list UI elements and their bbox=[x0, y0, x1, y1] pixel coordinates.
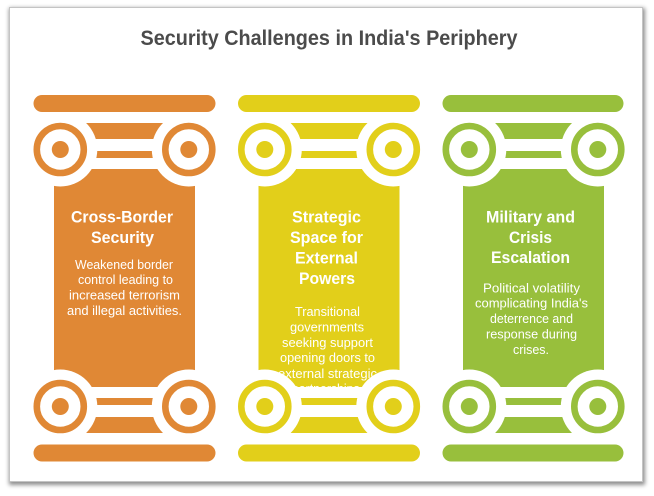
text: military and crisis description: complicating India's bbox=[475, 296, 588, 311]
heading: cross-border security: Cross-Border bbox=[71, 208, 173, 227]
text: strategic space description: partnerships. bbox=[292, 381, 363, 396]
heading: military and crisis escalation bbox=[486, 208, 575, 267]
icon: top right volute bbox=[574, 126, 621, 173]
text: cross-border description: increased terrorism bbox=[69, 288, 180, 302]
heading: military and crisis escalation: Military and bbox=[486, 208, 575, 227]
icon: bottom right volute bbox=[165, 383, 212, 430]
heading: strategic space for external powers: External bbox=[295, 248, 358, 268]
text: military and crisis description: crises. bbox=[513, 342, 549, 357]
text: cross-border description: and illegal activities. bbox=[67, 303, 182, 318]
icon: bottom left volute bbox=[446, 383, 493, 430]
top capital bands bbox=[264, 123, 394, 158]
heading: military and crisis escalation: Escalation bbox=[491, 248, 570, 267]
icon: top left volute bbox=[37, 126, 84, 173]
bottom bar bbox=[442, 444, 624, 462]
white halos around volutes bbox=[228, 112, 430, 444]
text: military and crisis description bbox=[475, 280, 588, 357]
text: military and crisis description: response during bbox=[486, 326, 577, 342]
text: military and crisis description: deterrence and bbox=[490, 311, 573, 326]
white mask below column body bbox=[258, 387, 400, 398]
white halos around volutes bbox=[432, 112, 635, 444]
top bar bbox=[442, 95, 624, 112]
heading: cross-border security: Security bbox=[91, 228, 155, 247]
icon: top right volute bbox=[165, 126, 212, 173]
heading: cross-border security bbox=[71, 208, 173, 247]
heading: strategic space for external powers: Space for bbox=[290, 228, 363, 247]
column body bbox=[54, 169, 195, 387]
icon: top left volute bbox=[446, 126, 493, 173]
heading: strategic space for external powers: Powers bbox=[299, 269, 355, 288]
text: strategic space description: seeking support bbox=[282, 335, 373, 350]
top capital bands bbox=[469, 123, 598, 158]
column body bbox=[463, 169, 604, 387]
panel: cross-border security column bbox=[23, 95, 226, 462]
bottom capital bands bbox=[60, 398, 189, 433]
text: strategic space description: external strategic bbox=[278, 366, 377, 381]
text: cross-border description: Weakened border bbox=[75, 257, 174, 272]
text: cross-border description: control leading to bbox=[78, 272, 173, 287]
icon: bottom right volute bbox=[574, 383, 621, 430]
icon: top right volute bbox=[370, 126, 417, 173]
bottom bar bbox=[238, 444, 420, 462]
heading: military and crisis escalation: Crisis bbox=[509, 228, 552, 247]
icon: bottom right volute bbox=[370, 383, 417, 430]
bottom bar bbox=[34, 444, 216, 462]
icon: top left volute bbox=[241, 126, 288, 173]
icon: bottom left volute bbox=[241, 383, 288, 430]
top bar bbox=[238, 95, 420, 112]
heading: strategic space for external powers: Strategic bbox=[292, 208, 361, 227]
top capital bands bbox=[60, 123, 189, 158]
panel: military and crisis escalation column bbox=[432, 95, 635, 462]
white halos around volutes bbox=[23, 112, 226, 444]
top bar bbox=[34, 95, 216, 112]
text: strategic space description bbox=[278, 304, 377, 396]
column body bbox=[258, 169, 400, 387]
text: strategic space description: governments bbox=[290, 320, 364, 334]
text: cross-border description bbox=[67, 257, 182, 318]
bottom capital bands bbox=[264, 398, 394, 433]
text: strategic space description: opening doors to bbox=[280, 350, 375, 365]
text: military and crisis description: Political volatility bbox=[483, 280, 580, 296]
heading: strategic space for external powers bbox=[290, 208, 363, 288]
bottom capital bands bbox=[469, 398, 598, 433]
icon: bottom left volute bbox=[37, 383, 84, 430]
text: strategic space description: Transitional bbox=[295, 304, 360, 319]
title: Security Challenges in India's Periphery bbox=[140, 27, 518, 50]
panel: strategic space column bbox=[228, 95, 430, 462]
